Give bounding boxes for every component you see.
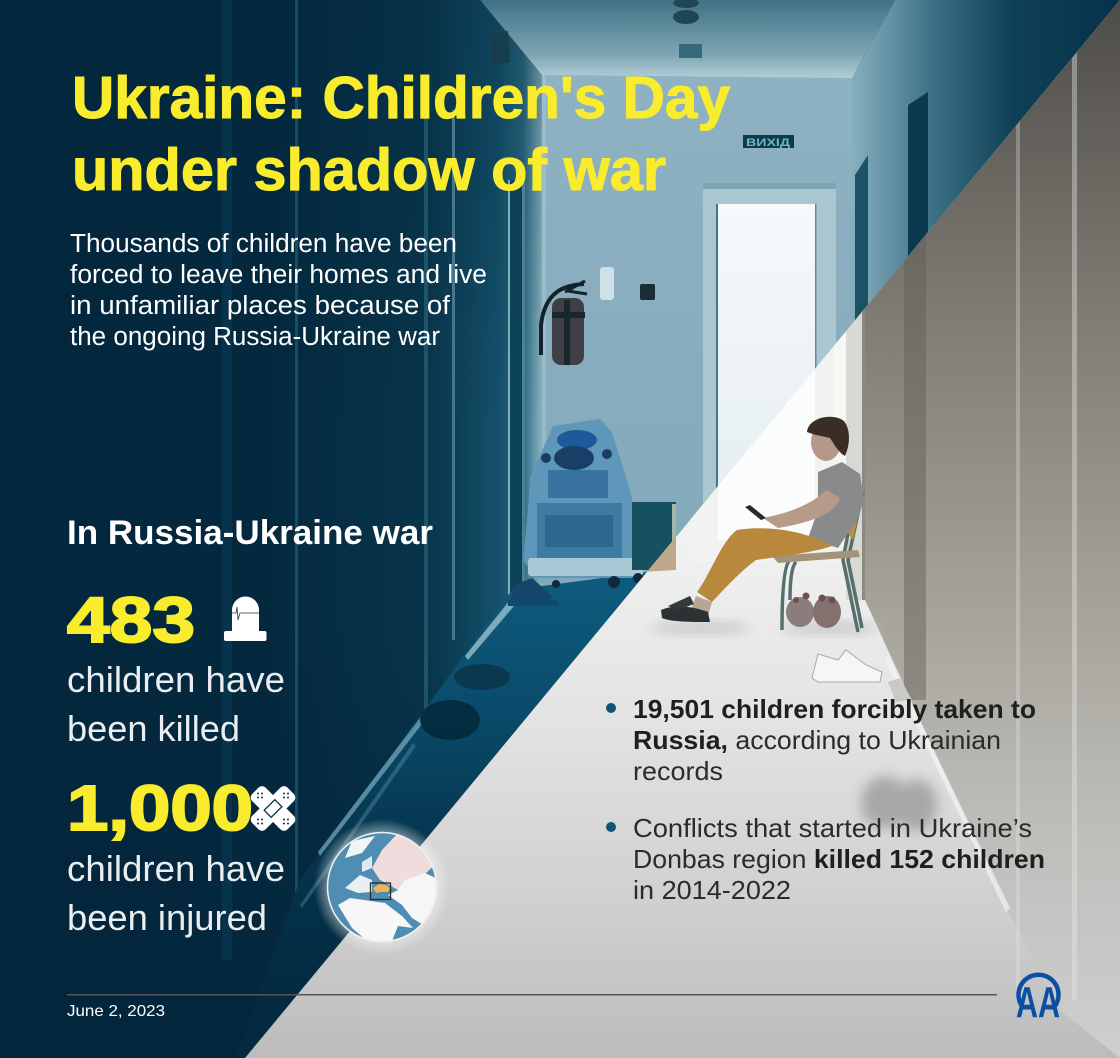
trousers [697, 528, 832, 602]
bullet: forcibly taken: 19,501 children forcibly taken to [633, 694, 1036, 724]
boy on a chair [661, 417, 864, 632]
ceiling [480, 0, 895, 78]
covered cart [523, 419, 646, 588]
shirt [808, 462, 864, 548]
bullet: Donbas conflict: in 2014-2022 [633, 875, 791, 905]
bullet: Donbas conflict: Conflicts that started in Ukraine’s [633, 813, 1032, 843]
exit sign [743, 135, 794, 149]
fire extinguisher [541, 281, 587, 365]
locator globe [314, 819, 450, 955]
stat: children killed: children have [67, 659, 285, 700]
stat: children injured: children have [67, 848, 285, 889]
floor [282, 572, 646, 931]
stats heading: In Russia-Ukraine war [67, 514, 433, 552]
bullet: Donbas conflict: Donbas region killed 152 children [633, 844, 1045, 874]
bullet: forcibly taken: Russia, according to Ukrainian [633, 725, 1001, 755]
subtitle: Thousands of children have been [70, 230, 457, 258]
slippers [786, 597, 814, 627]
title: Ukraine: Children's Day [72, 65, 730, 131]
bullet: Donbas conflict [606, 813, 1045, 905]
stat: children killed: 483 [67, 584, 195, 656]
icon: bandage [249, 784, 297, 833]
door [703, 189, 836, 504]
leg and sandals [692, 596, 712, 614]
Africa and Arabia [338, 898, 413, 945]
floor shadow [650, 622, 750, 634]
photo: corridor in blue tint [222, 0, 1120, 960]
bin [632, 502, 676, 570]
stat: children injured [67, 772, 285, 938]
Europe [345, 875, 372, 893]
subtitle [70, 230, 487, 351]
subtitle: in unfamiliar places because of [70, 292, 451, 320]
head [811, 434, 839, 461]
date: June 2, 2023 [67, 1003, 165, 1020]
stat: children killed: been killed [67, 708, 240, 749]
left wall [382, 0, 541, 733]
photo: corridor in natural tone [245, 0, 1120, 1058]
stat: children injured: been injured [67, 897, 267, 938]
shoes on the dark floor [420, 578, 558, 740]
back wall and door [690, 309, 864, 520]
footer rule [67, 994, 997, 996]
faded shadow of shoes [861, 776, 937, 831]
right wall [852, 0, 1120, 322]
subtitle: forced to leave their homes and live [70, 261, 487, 289]
icon: gravestone [224, 596, 266, 641]
right wall [862, 0, 1120, 1058]
logo: Anadolu Agency: AA [1016, 978, 1060, 1027]
stat: children injured: 1,000 [67, 772, 253, 844]
stat: children killed [67, 584, 285, 749]
logo: Anadolu Agency [1016, 975, 1060, 1027]
Russia [372, 835, 432, 890]
exit sign: ВИХІД [746, 137, 790, 149]
title: under shadow of war [72, 137, 666, 203]
chair [782, 490, 863, 632]
back wall [535, 70, 855, 600]
ceiling fixtures [673, 0, 699, 8]
intercom and alarm [600, 267, 614, 300]
Ukraine marker [370, 883, 390, 900]
Scandinavia and Greenland [345, 836, 375, 858]
title [72, 65, 730, 203]
doors on the walls [222, 0, 232, 960]
wall panels [904, 235, 926, 700]
arm and hand [763, 490, 840, 528]
bullet: forcibly taken [606, 694, 1036, 786]
Asia [388, 873, 436, 924]
shoe by the wall [888, 678, 912, 702]
subtitle: the ongoing Russia-Ukraine war [70, 323, 441, 351]
bullet: forcibly taken: records [633, 756, 723, 786]
white shoe [812, 650, 882, 682]
